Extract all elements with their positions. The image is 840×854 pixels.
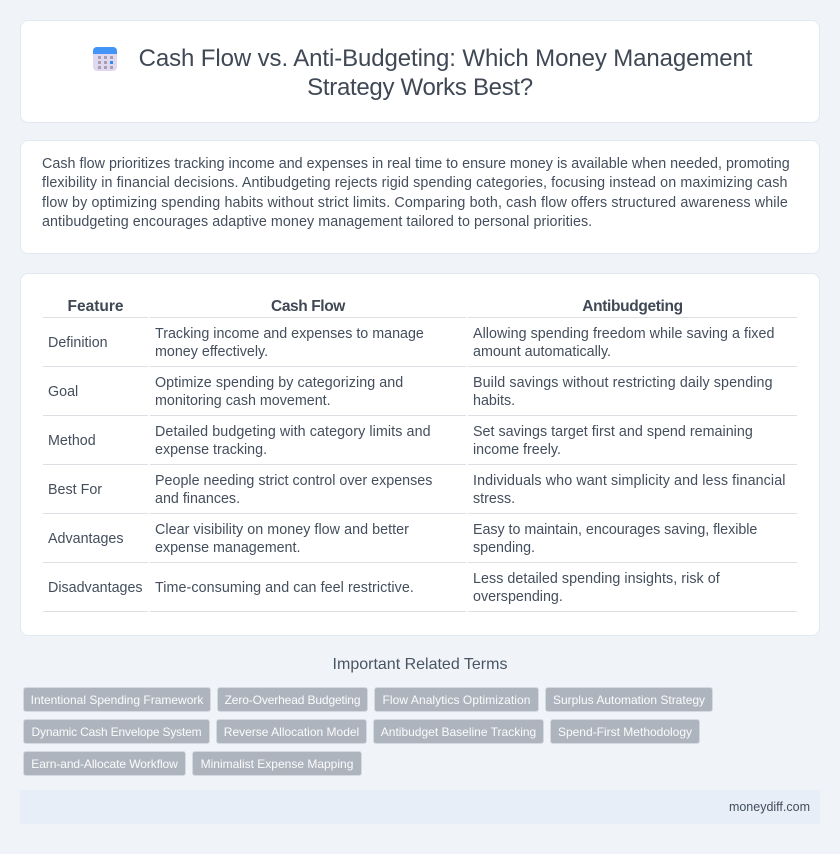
row: goal: [43, 375, 797, 416]
table header: [43, 298, 797, 318]
row: method: [43, 424, 797, 465]
row: disadvantages: Less detailed spending insights, risk of: [473, 571, 720, 587]
row: method: Method: [48, 433, 96, 449]
row: method: income freely.: [473, 442, 561, 458]
tag: Minimalist Expense Mapping: [201, 757, 353, 771]
intro paragraph: flexibility in financial decisions. Antibudgeting rejects rigid spending categories, focusing instead on maximizing cash: [42, 175, 788, 191]
title: Cash Flow vs. Anti-Budgeting: Which Money Management: [139, 45, 752, 72]
tag: Spend-First Methodology: [558, 725, 692, 739]
row: method: expense tracking.: [155, 442, 267, 458]
tag: [374, 687, 539, 712]
tag: Flow Analytics Optimization: [383, 693, 530, 707]
row: disadvantages: [43, 571, 797, 612]
row: definition: money effectively.: [155, 344, 268, 360]
intro paragraph: Cash flow prioritizes tracking income and expenses in real time to ensure money is available when needed, promoting: [42, 156, 790, 172]
row: goal: habits.: [473, 393, 515, 409]
tag: Antibudget Baseline Tracking: [381, 725, 536, 739]
tag: [216, 719, 367, 744]
tag: [550, 719, 700, 744]
comparison table panel: [20, 273, 820, 636]
row: method: Set savings target first and spend remaining: [473, 424, 753, 440]
tag: [23, 687, 211, 712]
tag: [373, 719, 544, 744]
row: goal: Build savings without restricting daily spending: [473, 375, 773, 391]
tag: [23, 751, 186, 776]
tag: [545, 687, 713, 712]
tag: Intentional Spending Framework: [31, 693, 203, 707]
row: best for: stress.: [473, 491, 515, 507]
row: best for: Best For: [48, 482, 102, 498]
row: advantages: Clear visibility on money flow and better: [155, 522, 409, 538]
row: disadvantages: Disadvantages: [48, 580, 143, 596]
row: advantages: spending.: [473, 540, 535, 556]
intro paragraph: antibudgeting encourages adaptive money management tailored to personal priorities.: [42, 214, 592, 230]
tag: Surplus Automation Strategy: [553, 693, 705, 707]
row: disadvantages: Time-consuming and can feel restrictive.: [155, 580, 414, 596]
tag: Dynamic Cash Envelope System: [32, 725, 201, 739]
row: best for: and finances.: [155, 491, 240, 507]
tag: Zero-Overhead Budgeting: [225, 693, 360, 707]
row: best for: Individuals who want simplicity and less financial: [473, 473, 786, 489]
row: goal: Goal: [48, 384, 78, 400]
row: disadvantages: overspending.: [473, 589, 563, 605]
tag: [192, 751, 362, 776]
title: Strategy Works Best?: [307, 74, 533, 101]
related terms heading: Important Related Terms: [333, 656, 507, 673]
intro paragraph: flow by optimizing spending habits without strict limits. Comparing both, cash flow offers structured awareness while: [42, 195, 788, 211]
table header: Feature: [68, 298, 124, 315]
footer bar: [20, 790, 820, 824]
tag: [217, 687, 368, 712]
row: advantages: [43, 522, 797, 563]
row: advantages: expense management.: [155, 540, 300, 556]
row: goal: Optimize spending by categorizing and: [155, 375, 403, 391]
related terms tags: [23, 687, 713, 776]
intro paragraph: [42, 156, 790, 230]
row: advantages: Advantages: [48, 531, 124, 547]
tag: Earn-and-Allocate Workflow: [31, 757, 178, 771]
row: goal: monitoring cash movement.: [155, 393, 331, 409]
row: definition: amount automatically.: [473, 344, 611, 360]
row: best for: People needing strict control over expenses: [155, 473, 432, 489]
row: definition: [43, 326, 797, 367]
footer site name: moneydiff.com: [729, 800, 810, 814]
tag: [23, 719, 210, 744]
row: definition: Tracking income and expenses to manage: [155, 326, 424, 342]
icon: calendar: [93, 47, 117, 71]
row: advantages: Easy to maintain, encourages saving, flexible: [473, 522, 757, 538]
row: definition: Definition: [48, 335, 108, 351]
tag: Reverse Allocation Model: [224, 725, 359, 739]
table header: Antibudgeting: [582, 298, 683, 315]
table header: Cash Flow: [271, 298, 345, 315]
header card: [20, 20, 820, 123]
title: [139, 45, 752, 101]
intro text panel: [20, 140, 820, 254]
row: definition: Allowing spending freedom while saving a fixed: [473, 326, 774, 342]
row: best for: [43, 473, 797, 514]
row: method: Detailed budgeting with category limits and: [155, 424, 431, 440]
